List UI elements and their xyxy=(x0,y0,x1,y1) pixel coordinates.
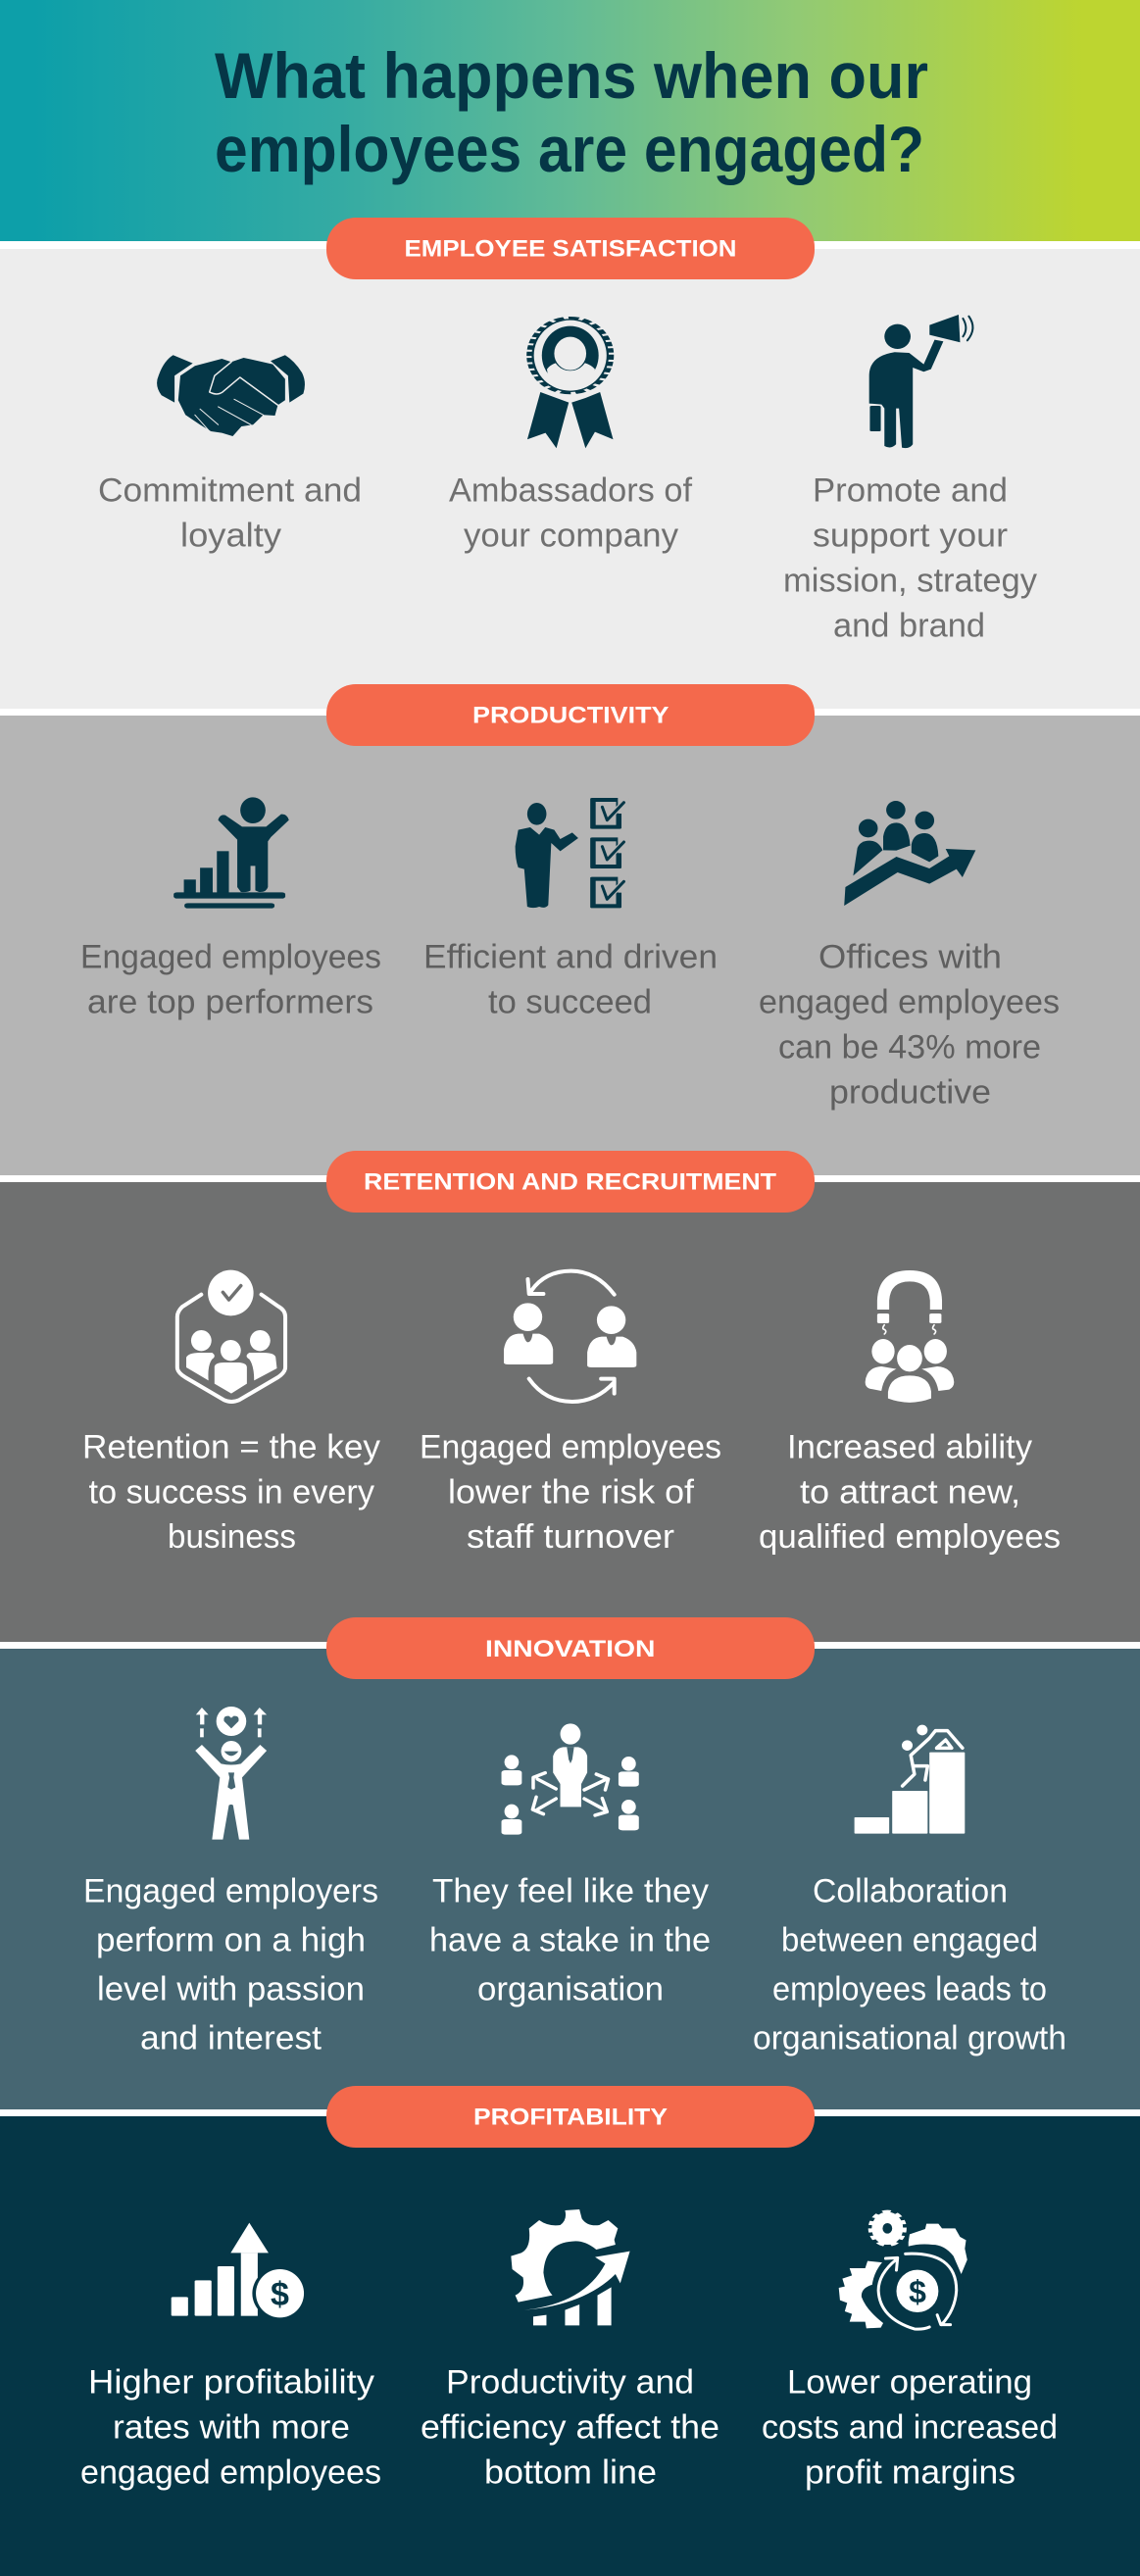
text: staff turnover: Engaged employees xyxy=(420,1428,721,1465)
text: perform on a high level xyxy=(83,1872,378,2056)
icon: growth bars with coin xyxy=(172,2223,308,2319)
text: attract employees: qualified employees xyxy=(759,1518,1061,1556)
icon: team in shield with check xyxy=(177,1270,285,1402)
text: bottom line: efficiency affect the xyxy=(421,2409,719,2447)
pill: innovation xyxy=(326,1617,815,1679)
text: higher profitability: engaged employees xyxy=(80,2454,381,2492)
text: 43% more productive: engaged employees xyxy=(759,983,1060,1020)
text: bottom line: bottom line xyxy=(484,2454,657,2492)
text: retention: to success in every xyxy=(88,1473,374,1511)
text: collaboration: employees leads to xyxy=(772,1970,1047,2007)
text: higher profitability: Higher profitability xyxy=(88,2364,374,2402)
text: retention: business xyxy=(168,1518,296,1556)
icon: magnet attracting people xyxy=(866,1270,954,1403)
text: stake in the organisation: They feel like they xyxy=(432,1872,709,1909)
text: staff turnover xyxy=(420,1428,721,1556)
text: ambassadors xyxy=(449,472,693,555)
text: ambassadors: Ambassadors of xyxy=(449,472,693,510)
text: collaboration xyxy=(753,1872,1066,2056)
text: higher profitability xyxy=(80,2364,381,2492)
text: commitment and loyalty: Commitment and xyxy=(98,472,362,510)
icon: person on bar chart xyxy=(173,797,289,909)
text: efficient and driven: Efficient and driven xyxy=(423,939,718,976)
text: attract employees: to attract new, xyxy=(800,1473,1020,1511)
text: collaboration: organisational growth xyxy=(753,2019,1066,2056)
pill: productivity: PRODUCTIVITY xyxy=(472,703,669,729)
icon: team around leader xyxy=(502,1723,639,1835)
text: top performers xyxy=(80,939,381,1020)
text: perform on a high level: Engaged employers xyxy=(83,1872,378,1909)
text: bottom line: Productivity and xyxy=(446,2364,694,2402)
text: lower operating costs: profit margins xyxy=(805,2454,1016,2492)
pill: employee satisfaction xyxy=(326,218,815,279)
pill: profitability xyxy=(326,2086,815,2148)
icon: gears with coin cycle xyxy=(839,2212,967,2332)
icon: handshake xyxy=(157,355,305,436)
text: collaboration: between engaged xyxy=(781,1921,1038,1958)
icon: growth bars with coin: $ xyxy=(271,2276,289,2313)
text: promote and support: and brand xyxy=(833,608,985,645)
text: 43% more productive: Offices with xyxy=(818,939,1002,976)
text: stake in the organisation: organisation xyxy=(477,1970,664,2007)
text: ambassadors: your company xyxy=(464,518,678,555)
text: top performers: Engaged employees xyxy=(80,939,381,976)
pill: productivity xyxy=(326,684,815,746)
text: retention xyxy=(82,1428,380,1556)
pill: innovation: INNOVATION xyxy=(485,1636,655,1662)
text: perform on a high level: perform on a high xyxy=(96,1921,366,1958)
icon: gears with coin cycle: $ xyxy=(909,2274,926,2309)
text: staff turnover: staff turnover xyxy=(467,1518,674,1556)
pill: retention and recruitment: RETENTION AND RECRUITMENT xyxy=(364,1169,776,1196)
text: 43% more productive xyxy=(759,939,1060,1111)
text: commitment and loyalty xyxy=(98,472,362,555)
pill: retention and recruitment xyxy=(326,1151,815,1213)
text: staff turnover: lower the risk of xyxy=(448,1473,695,1511)
text: stake in the organisation: have a stake in the xyxy=(429,1921,711,1958)
panel: retention and recruitment xyxy=(0,1151,1140,1642)
text: commitment and loyalty: loyalty xyxy=(180,518,281,555)
text: 43% more productive: productive xyxy=(829,1073,991,1111)
text: efficient and driven: to succeed xyxy=(488,983,652,1020)
pill: profitability: PROFITABILITY xyxy=(473,2105,668,2131)
title: What happens when our xyxy=(215,39,928,112)
icon: two people exchange xyxy=(504,1271,636,1402)
text: retention: Retention = the key xyxy=(82,1428,380,1465)
text: higher profitability: rates with more xyxy=(113,2409,350,2447)
icon: team with rising arrow xyxy=(844,801,975,906)
text: stake in the organisation xyxy=(429,1872,711,2007)
icon: person with checklist xyxy=(516,797,628,908)
text: 43% more productive: can be 43% more xyxy=(778,1028,1041,1065)
header banner xyxy=(0,0,1140,241)
text: bottom line xyxy=(421,2364,719,2492)
panel: profitability xyxy=(0,2086,1140,2576)
title: employees are engaged? xyxy=(215,113,924,185)
text: attract employees xyxy=(759,1428,1061,1556)
text: perform on a high level: and interest xyxy=(140,2019,322,2056)
icon: person with megaphone xyxy=(869,315,972,448)
text: lower operating costs: Lower operating xyxy=(787,2364,1032,2402)
text: attract employees: Increased ability xyxy=(787,1428,1032,1465)
icon: climbing steps xyxy=(855,1725,965,1834)
panel: innovation xyxy=(0,1617,1140,2109)
text: perform on a high level: level with passion xyxy=(97,1970,365,2007)
text: collaboration: Collaboration xyxy=(813,1872,1008,1909)
icon: rosette xyxy=(527,319,614,448)
text: promote and support: mission, strategy xyxy=(783,563,1037,600)
text: promote and support: support your xyxy=(813,518,1008,555)
text: lower operating costs xyxy=(762,2364,1058,2492)
text: promote and support xyxy=(783,472,1037,645)
text: top performers: are top performers xyxy=(87,983,373,1020)
icon: passionate person xyxy=(195,1707,267,1840)
text: promote and support: Promote and xyxy=(813,472,1008,510)
panel: employee satisfaction xyxy=(0,218,1140,709)
text: lower operating costs: costs and increased xyxy=(762,2409,1058,2447)
panel: productivity xyxy=(0,684,1140,1175)
title xyxy=(215,39,928,185)
icon: gear with rising arrow xyxy=(511,2209,630,2325)
pill: employee satisfaction: EMPLOYEE SATISFACTION xyxy=(404,236,737,263)
text: efficient and driven xyxy=(423,939,718,1020)
